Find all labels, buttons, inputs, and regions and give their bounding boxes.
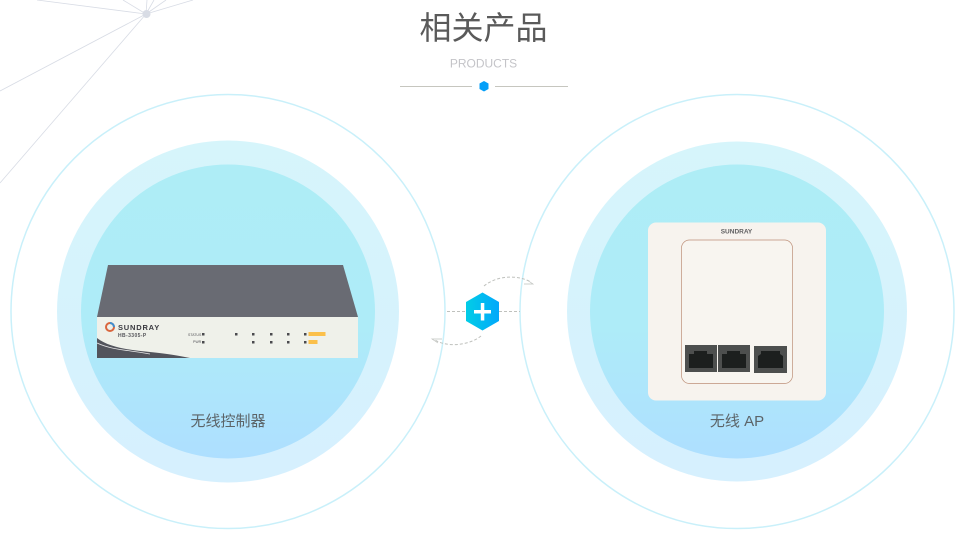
device top bbox=[97, 265, 358, 317]
icon: plus hexagon bbox=[466, 292, 499, 330]
panel: wireless AP circles bbox=[520, 94, 954, 528]
label: wireless controller: 无线控制器 bbox=[190, 413, 266, 430]
label: wireless AP: 无线 AP bbox=[710, 413, 764, 430]
panel: wireless controller circles bbox=[11, 94, 445, 528]
brand text: SUNDRAY bbox=[118, 323, 160, 332]
indicator lights bbox=[202, 333, 306, 344]
product: wireless AP panel bbox=[648, 222, 826, 400]
title: 相关产品 bbox=[419, 10, 548, 46]
inner frame bbox=[682, 240, 792, 384]
brand text: SUNDRAY bbox=[721, 228, 753, 236]
model text: HB-3305-P bbox=[118, 333, 147, 339]
connector: dashed lines and arrows bbox=[432, 277, 533, 345]
title divider with hexagon bbox=[400, 81, 568, 92]
background network lines bbox=[0, 0, 193, 183]
ethernet ports bbox=[685, 345, 787, 373]
product: wireless controller device bbox=[97, 265, 358, 358]
status labels: STATUS bbox=[188, 333, 202, 337]
logo mark bbox=[106, 323, 114, 331]
faceplate bbox=[648, 222, 826, 400]
product: wireless controller device: PWR bbox=[193, 340, 202, 344]
device front panel bbox=[97, 317, 358, 358]
orange tags bbox=[308, 332, 326, 344]
subtitle: PRODUCTS bbox=[450, 56, 517, 70]
